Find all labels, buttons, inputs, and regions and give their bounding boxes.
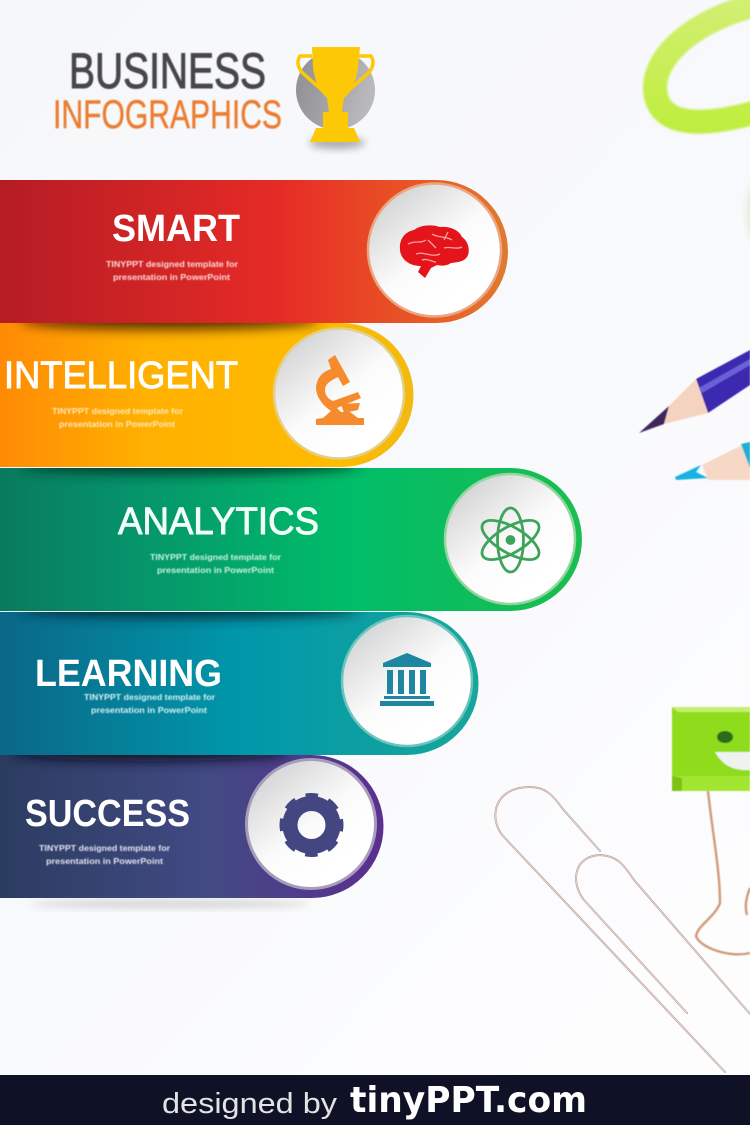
icon: atom bbox=[476, 508, 545, 572]
description: TINYPPT designed template for bbox=[52, 406, 184, 416]
footer text: designed by: designed by bbox=[162, 1088, 338, 1120]
footer bar bbox=[0, 1075, 750, 1125]
icon disc bbox=[342, 616, 472, 746]
blurred green object at edge bbox=[748, 184, 750, 240]
description bbox=[52, 406, 184, 429]
heading: BUSINESS: BUSINESS bbox=[69, 43, 266, 99]
icon: brain bbox=[400, 225, 469, 278]
blue pencil bbox=[639, 350, 750, 433]
green binder clip bbox=[672, 707, 750, 954]
description bbox=[39, 843, 171, 866]
shadow bbox=[18, 468, 364, 483]
icon disc bbox=[246, 760, 376, 888]
description: presentation in PowerPoint bbox=[46, 856, 163, 866]
panel: LEARNING bbox=[0, 600, 478, 755]
band bbox=[0, 180, 508, 323]
panel: INTELLIGENT bbox=[0, 311, 414, 467]
band bbox=[0, 323, 414, 467]
description: presentation in PowerPoint bbox=[113, 272, 230, 282]
icon disc bbox=[274, 328, 404, 458]
shadow bbox=[20, 311, 320, 329]
band bbox=[0, 612, 478, 755]
panel: SMART bbox=[0, 180, 508, 323]
heading: SMART bbox=[112, 208, 240, 250]
heading: INFOGRAPHICS: INFOGRAPHICS bbox=[53, 93, 282, 137]
icon disc bbox=[368, 184, 501, 316]
panel: ANALYTICS bbox=[0, 456, 582, 611]
description bbox=[106, 259, 239, 282]
heading: LEARNING bbox=[35, 653, 222, 695]
panel: SUCCESS bbox=[0, 743, 384, 898]
heading: SUCCESS bbox=[25, 793, 190, 835]
cyan pencil bbox=[675, 442, 750, 480]
footer text: tinyPPT.com: tinyPPT.com bbox=[350, 1080, 587, 1121]
title bbox=[53, 43, 282, 137]
description bbox=[84, 692, 216, 715]
icon: trophy bbox=[296, 47, 375, 149]
heading: INTELLIGENT bbox=[4, 355, 238, 397]
shadow bbox=[8, 755, 293, 770]
green rubber loop bbox=[655, 2, 750, 122]
description: TINYPPT designed template for bbox=[39, 843, 171, 853]
band bbox=[0, 755, 384, 898]
icon: temple bbox=[380, 653, 434, 706]
description: presentation in PowerPoint bbox=[157, 565, 274, 575]
description bbox=[150, 552, 282, 575]
icon: microscope bbox=[316, 355, 364, 425]
paperclips bbox=[495, 787, 750, 1072]
description: TINYPPT designed template for bbox=[84, 692, 216, 702]
shadow under last band bbox=[30, 900, 310, 908]
icon: gear bbox=[284, 798, 339, 852]
heading: ANALYTICS bbox=[118, 501, 319, 543]
icon disc bbox=[445, 474, 575, 604]
band bbox=[0, 468, 582, 611]
shadow bbox=[18, 612, 363, 627]
description: TINYPPT designed template for bbox=[150, 552, 282, 562]
description: presentation in PowerPoint bbox=[59, 419, 175, 429]
description: TINYPPT designed template for bbox=[106, 259, 239, 269]
description: presentation in PowerPoint bbox=[91, 705, 207, 715]
